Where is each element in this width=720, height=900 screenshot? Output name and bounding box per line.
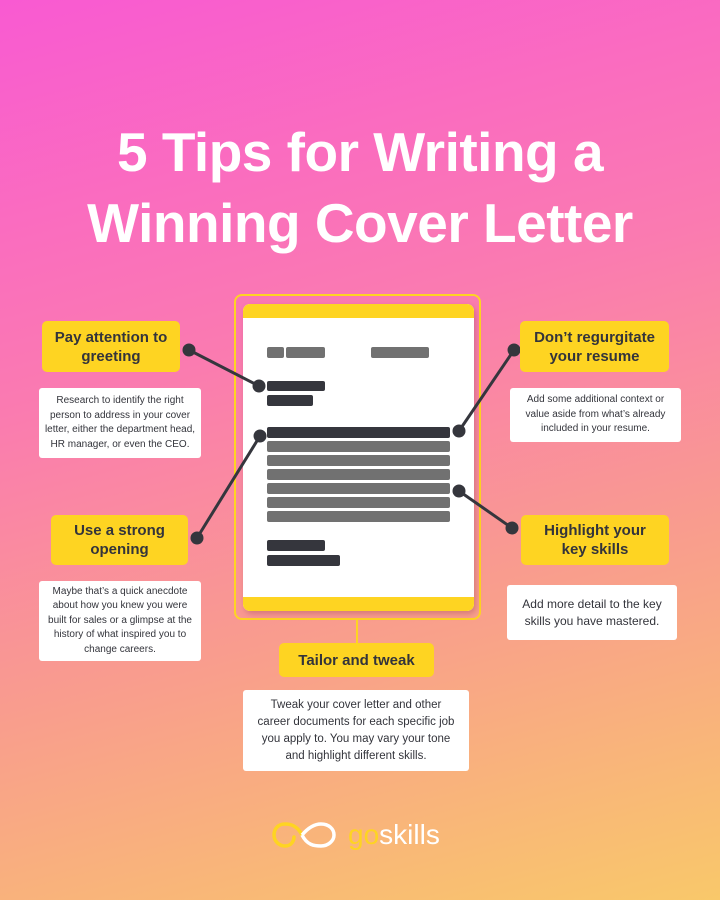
tip 3 heading: Use a strong <box>74 522 165 539</box>
tip 1 heading <box>42 321 180 372</box>
tip 2 heading: your resume <box>549 348 640 364</box>
tip 3 text: Maybe that’s a quick anecdote about how you knew you were built for sales or a glimpse at the history of what inspired you to change careers. <box>48 586 192 655</box>
logo text: goskills <box>348 819 440 850</box>
letter illustration <box>234 294 481 620</box>
tip 3 heading: opening <box>90 541 149 558</box>
tip 5 text: Tweak your cover letter and other career documents for each specific job you apply to. You may vary your tone and highlight different skills. <box>258 698 454 762</box>
title: 5 Tips for Writing a <box>117 121 603 183</box>
tip 2 text <box>510 388 681 442</box>
letter text bars <box>267 347 450 566</box>
tip 4 text <box>507 585 677 640</box>
logo <box>272 819 440 850</box>
tip 3 heading <box>51 515 188 565</box>
tip 2 heading <box>520 321 669 372</box>
tip 4 text: Add more detail to the key skills you have mastered. <box>522 596 662 628</box>
tip 4 heading <box>521 515 669 565</box>
title: Winning Cover Letter <box>87 192 633 254</box>
tip 4 heading: Highlight your <box>544 522 646 539</box>
tip 2 heading: Don’t regurgitate <box>534 328 655 346</box>
tip 1 heading: Pay attention to <box>55 328 167 346</box>
icon: infinity <box>272 822 336 848</box>
tip 4 heading: key skills <box>562 541 628 558</box>
tip 1 text: Research to identify the right person to address in your cover letter, either the department head, HR manager, or even the CEO. <box>45 395 195 450</box>
title <box>87 121 633 254</box>
tip 2 text: Add some additional context or value aside from what’s already included in your resume. <box>526 394 665 434</box>
paper <box>243 304 474 611</box>
tip 5 heading <box>279 643 434 677</box>
tip 5 heading: Tailor and tweak <box>298 652 415 668</box>
tip 1 heading: greeting <box>81 348 141 364</box>
tip 5 text <box>243 690 469 771</box>
